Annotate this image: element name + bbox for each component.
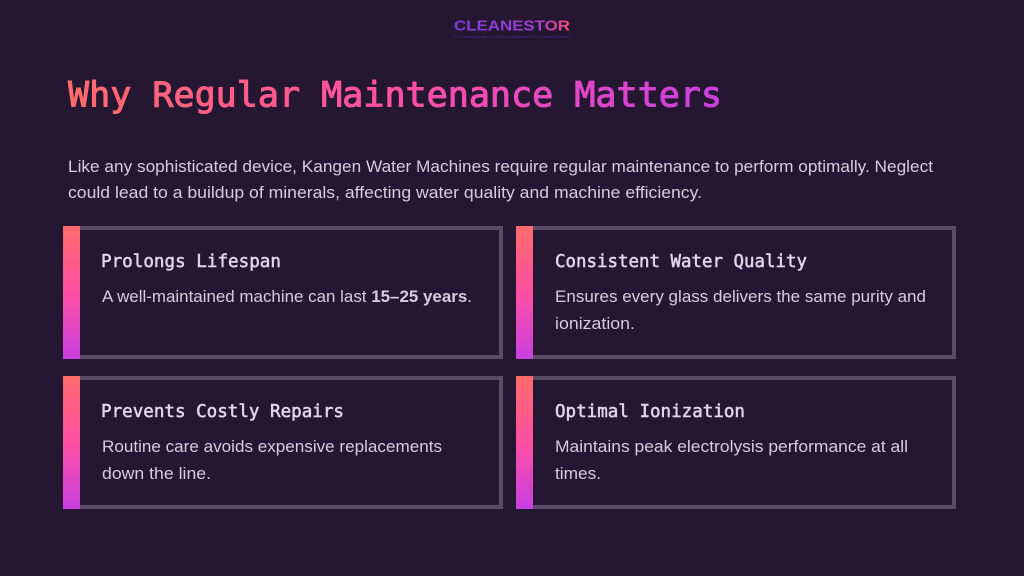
accent bar xyxy=(516,226,533,359)
intro text: Like any sophisticated device, Kangen Water Machines require regular maintenance to perform optimally. Neglect xyxy=(68,157,933,176)
card text xyxy=(102,438,442,483)
accent bar xyxy=(63,376,80,509)
panel: optimal ionization xyxy=(516,376,954,509)
card text xyxy=(555,438,908,483)
card heading: Prolongs Lifespan xyxy=(101,252,281,272)
panel: prevents costly repairs xyxy=(63,376,501,509)
card text: Ensures every glass delivers the same purity and xyxy=(555,288,926,306)
title: Why Regular Maintenance Matters xyxy=(68,76,722,116)
card text: Maintains peak electrolysis performance at all xyxy=(555,438,908,456)
card text: down the line. xyxy=(102,465,211,483)
card text: Routine care avoids expensive replacements xyxy=(102,438,442,456)
card heading: Optimal Ionization xyxy=(555,402,745,422)
card text: times. xyxy=(555,465,601,483)
card text: ionization. xyxy=(555,315,635,333)
intro text xyxy=(68,157,933,202)
card text xyxy=(555,288,926,333)
accent bar xyxy=(516,376,533,509)
card heading: Consistent Water Quality xyxy=(555,252,807,272)
logo tagline: Pro Cleaning Guides And Service Journalism From Cleaning Natives xyxy=(454,35,570,39)
logo wordmark: CLEANESTOR xyxy=(454,18,571,34)
card text: A well-maintained machine can last 15–25 years. xyxy=(102,288,472,306)
accent bar xyxy=(63,226,80,359)
intro text: could lead to a buildup of minerals, affecting water quality and machine efficiency. xyxy=(68,183,702,202)
logo xyxy=(454,18,571,39)
card heading: Prevents Costly Repairs xyxy=(101,402,344,422)
panel: prolongs lifespan xyxy=(63,226,501,359)
panel: consistent water quality xyxy=(516,226,954,359)
